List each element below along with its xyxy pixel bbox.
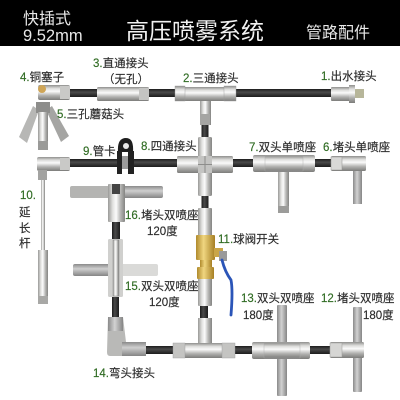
header left: connection type [23,10,83,45]
label 12 [321,291,394,322]
label 15: 120度 [149,295,180,309]
header left: connection type: 9.52mm [23,27,83,45]
label 13 [241,291,314,322]
label 15: 15.双头双喷座 [125,279,198,293]
label 2: 2.三通接头 [183,72,239,85]
label 10: 杆 [19,236,31,250]
part 12: plug double nozzle seat 180 degrees [330,307,364,392]
label 10: 10. [20,190,36,202]
label 10: 延 [19,206,31,219]
part 15: double-head double nozzle seat 120 degrees [73,239,158,297]
label 8: 8.四通接头 [141,140,197,153]
label 10 [19,190,36,250]
part 10: elbow and extension rod [37,157,70,304]
label 10: 长 [19,222,31,235]
part 11: brass ball valve [196,208,232,315]
part 16: plug double nozzle seat 120 degrees [70,184,163,222]
label 12: 12.堵头双喷座 [321,291,394,305]
part 3: straight coupling [97,87,149,101]
label 16 [125,208,198,238]
title: 高压喷雾系统 [126,18,264,44]
label 3: 3.直通接头 [93,56,149,70]
label 11: 11.球阀开关 [218,232,280,246]
pipes [68,89,333,354]
header band [0,0,400,46]
part 14: elbow connector [107,317,146,356]
part 1: water outlet connector [331,85,364,103]
part 4: brass plug [38,85,70,100]
label 12: 180度 [363,308,394,322]
part 2: three-way tee [175,86,236,125]
header right: subtitle: 管路配件 [306,24,370,42]
label 6: 6.堵头单喷座 [323,140,390,154]
bottom tee [173,318,235,358]
label 13: 180度 [243,308,274,322]
label 5: 5.三孔蘑菇头 [57,107,124,121]
label 15 [125,279,198,309]
label 3 [93,56,149,86]
header left: connection type: 快插式 [23,10,71,28]
part 6: plug single nozzle seat [331,156,366,204]
part 5: three-hole mushroom nozzle [19,102,69,150]
part 8: four-way cross [177,137,233,196]
part 7: double-head single nozzle seat [253,155,315,213]
label 9: 9.管卡 [83,144,116,158]
valve handle [222,260,232,315]
label 4: 4.铜塞子 [20,70,64,84]
label 16: 120度 [147,224,178,238]
label 3: （无孔） [103,73,149,86]
part 13: double-head double nozzle seat 180 degrees [252,305,310,396]
label 14: 14.弯头接头 [93,366,155,380]
label 13: 13.双头双喷座 [241,291,314,305]
part 9: pipe clamp [117,138,134,174]
label 7: 7.双头单喷座 [249,140,316,154]
label 16: 16.堵头双喷座 [125,208,198,222]
label 1: 1.出水接头 [321,69,377,83]
